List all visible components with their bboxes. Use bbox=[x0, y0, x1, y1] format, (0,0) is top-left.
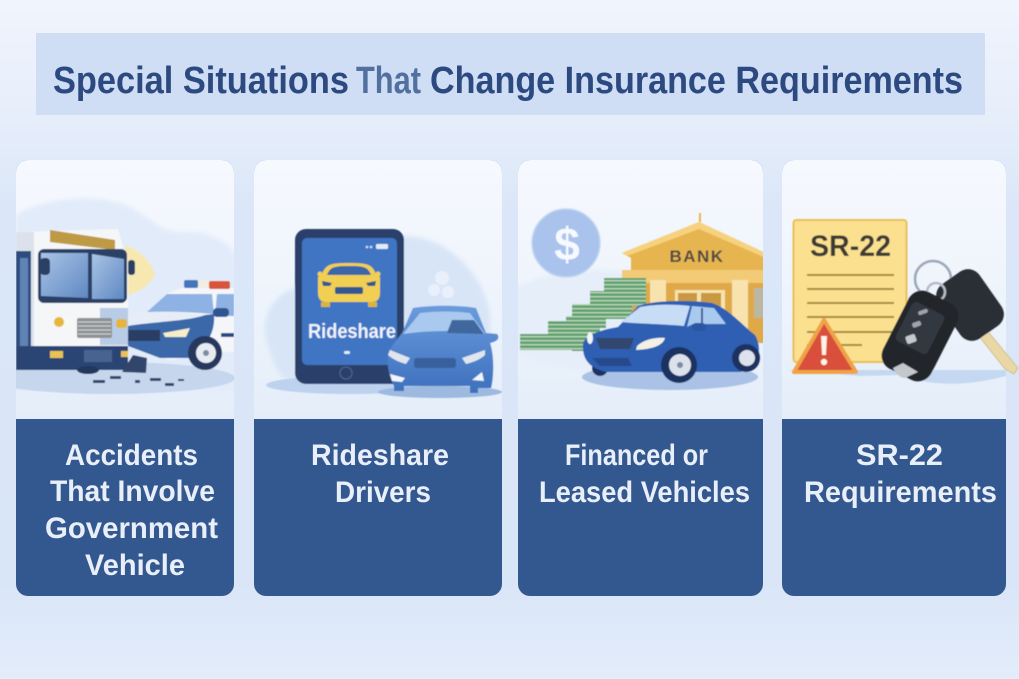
label: accidents: Accidents bbox=[65, 439, 198, 472]
SR-22 document bbox=[794, 220, 906, 362]
label: SR-22 requirements bbox=[804, 439, 997, 509]
document heading: SR-22 bbox=[810, 230, 891, 263]
label: SR-22 requirements: SR-22 bbox=[856, 439, 943, 472]
illustration: bus and police car collision bbox=[0, 198, 240, 394]
bank sign: BANK bbox=[669, 247, 725, 266]
blue sedan bbox=[388, 306, 498, 393]
label: accidents: That Involve bbox=[50, 475, 215, 508]
title text: Change Insurance Requirements bbox=[430, 60, 963, 102]
panel: SR-22 requirements bbox=[782, 160, 1018, 596]
bus bbox=[16, 229, 135, 374]
title text: That bbox=[356, 60, 421, 102]
panel: rideshare drivers bbox=[254, 160, 502, 596]
debris bbox=[93, 355, 184, 386]
icon: dollar coin: $ bbox=[554, 218, 580, 270]
panel: financed or leased vehicles bbox=[518, 160, 763, 596]
title banner bbox=[36, 33, 985, 115]
label: financed or leased vehicles bbox=[539, 439, 750, 509]
icon: yellow car bbox=[318, 263, 380, 307]
blue hatchback bbox=[583, 301, 760, 383]
illustration: tablet and car bbox=[265, 229, 502, 398]
label: financed or leased vehicles: Financed or bbox=[565, 439, 708, 472]
panel: accidents involving government vehicle bbox=[0, 160, 240, 596]
label: SR-22 requirements: Requirements bbox=[804, 476, 997, 509]
illustration: coin, bank, cash and car bbox=[518, 208, 763, 390]
icon: car keys bbox=[876, 261, 1018, 387]
cash stacks bbox=[520, 278, 646, 351]
label: accidents bbox=[45, 439, 218, 582]
bank building bbox=[622, 213, 770, 343]
tablet label: Rideshare bbox=[308, 321, 396, 343]
illustration: SR-22 document, warning sign and keys bbox=[786, 220, 1018, 387]
tablet bbox=[295, 229, 404, 384]
icon: dollar coin bbox=[532, 209, 600, 277]
label: rideshare drivers: Drivers bbox=[335, 476, 431, 509]
title text: Special Situations bbox=[53, 60, 349, 102]
label: financed or leased vehicles: Leased Vehicles bbox=[539, 476, 750, 509]
icon: warning triangle bbox=[794, 320, 856, 372]
police car bbox=[128, 280, 234, 370]
label: accidents: Government bbox=[45, 512, 218, 545]
label: rideshare drivers: Rideshare bbox=[311, 439, 449, 472]
label: accidents: Vehicle bbox=[85, 549, 185, 582]
label: rideshare drivers bbox=[311, 439, 449, 509]
